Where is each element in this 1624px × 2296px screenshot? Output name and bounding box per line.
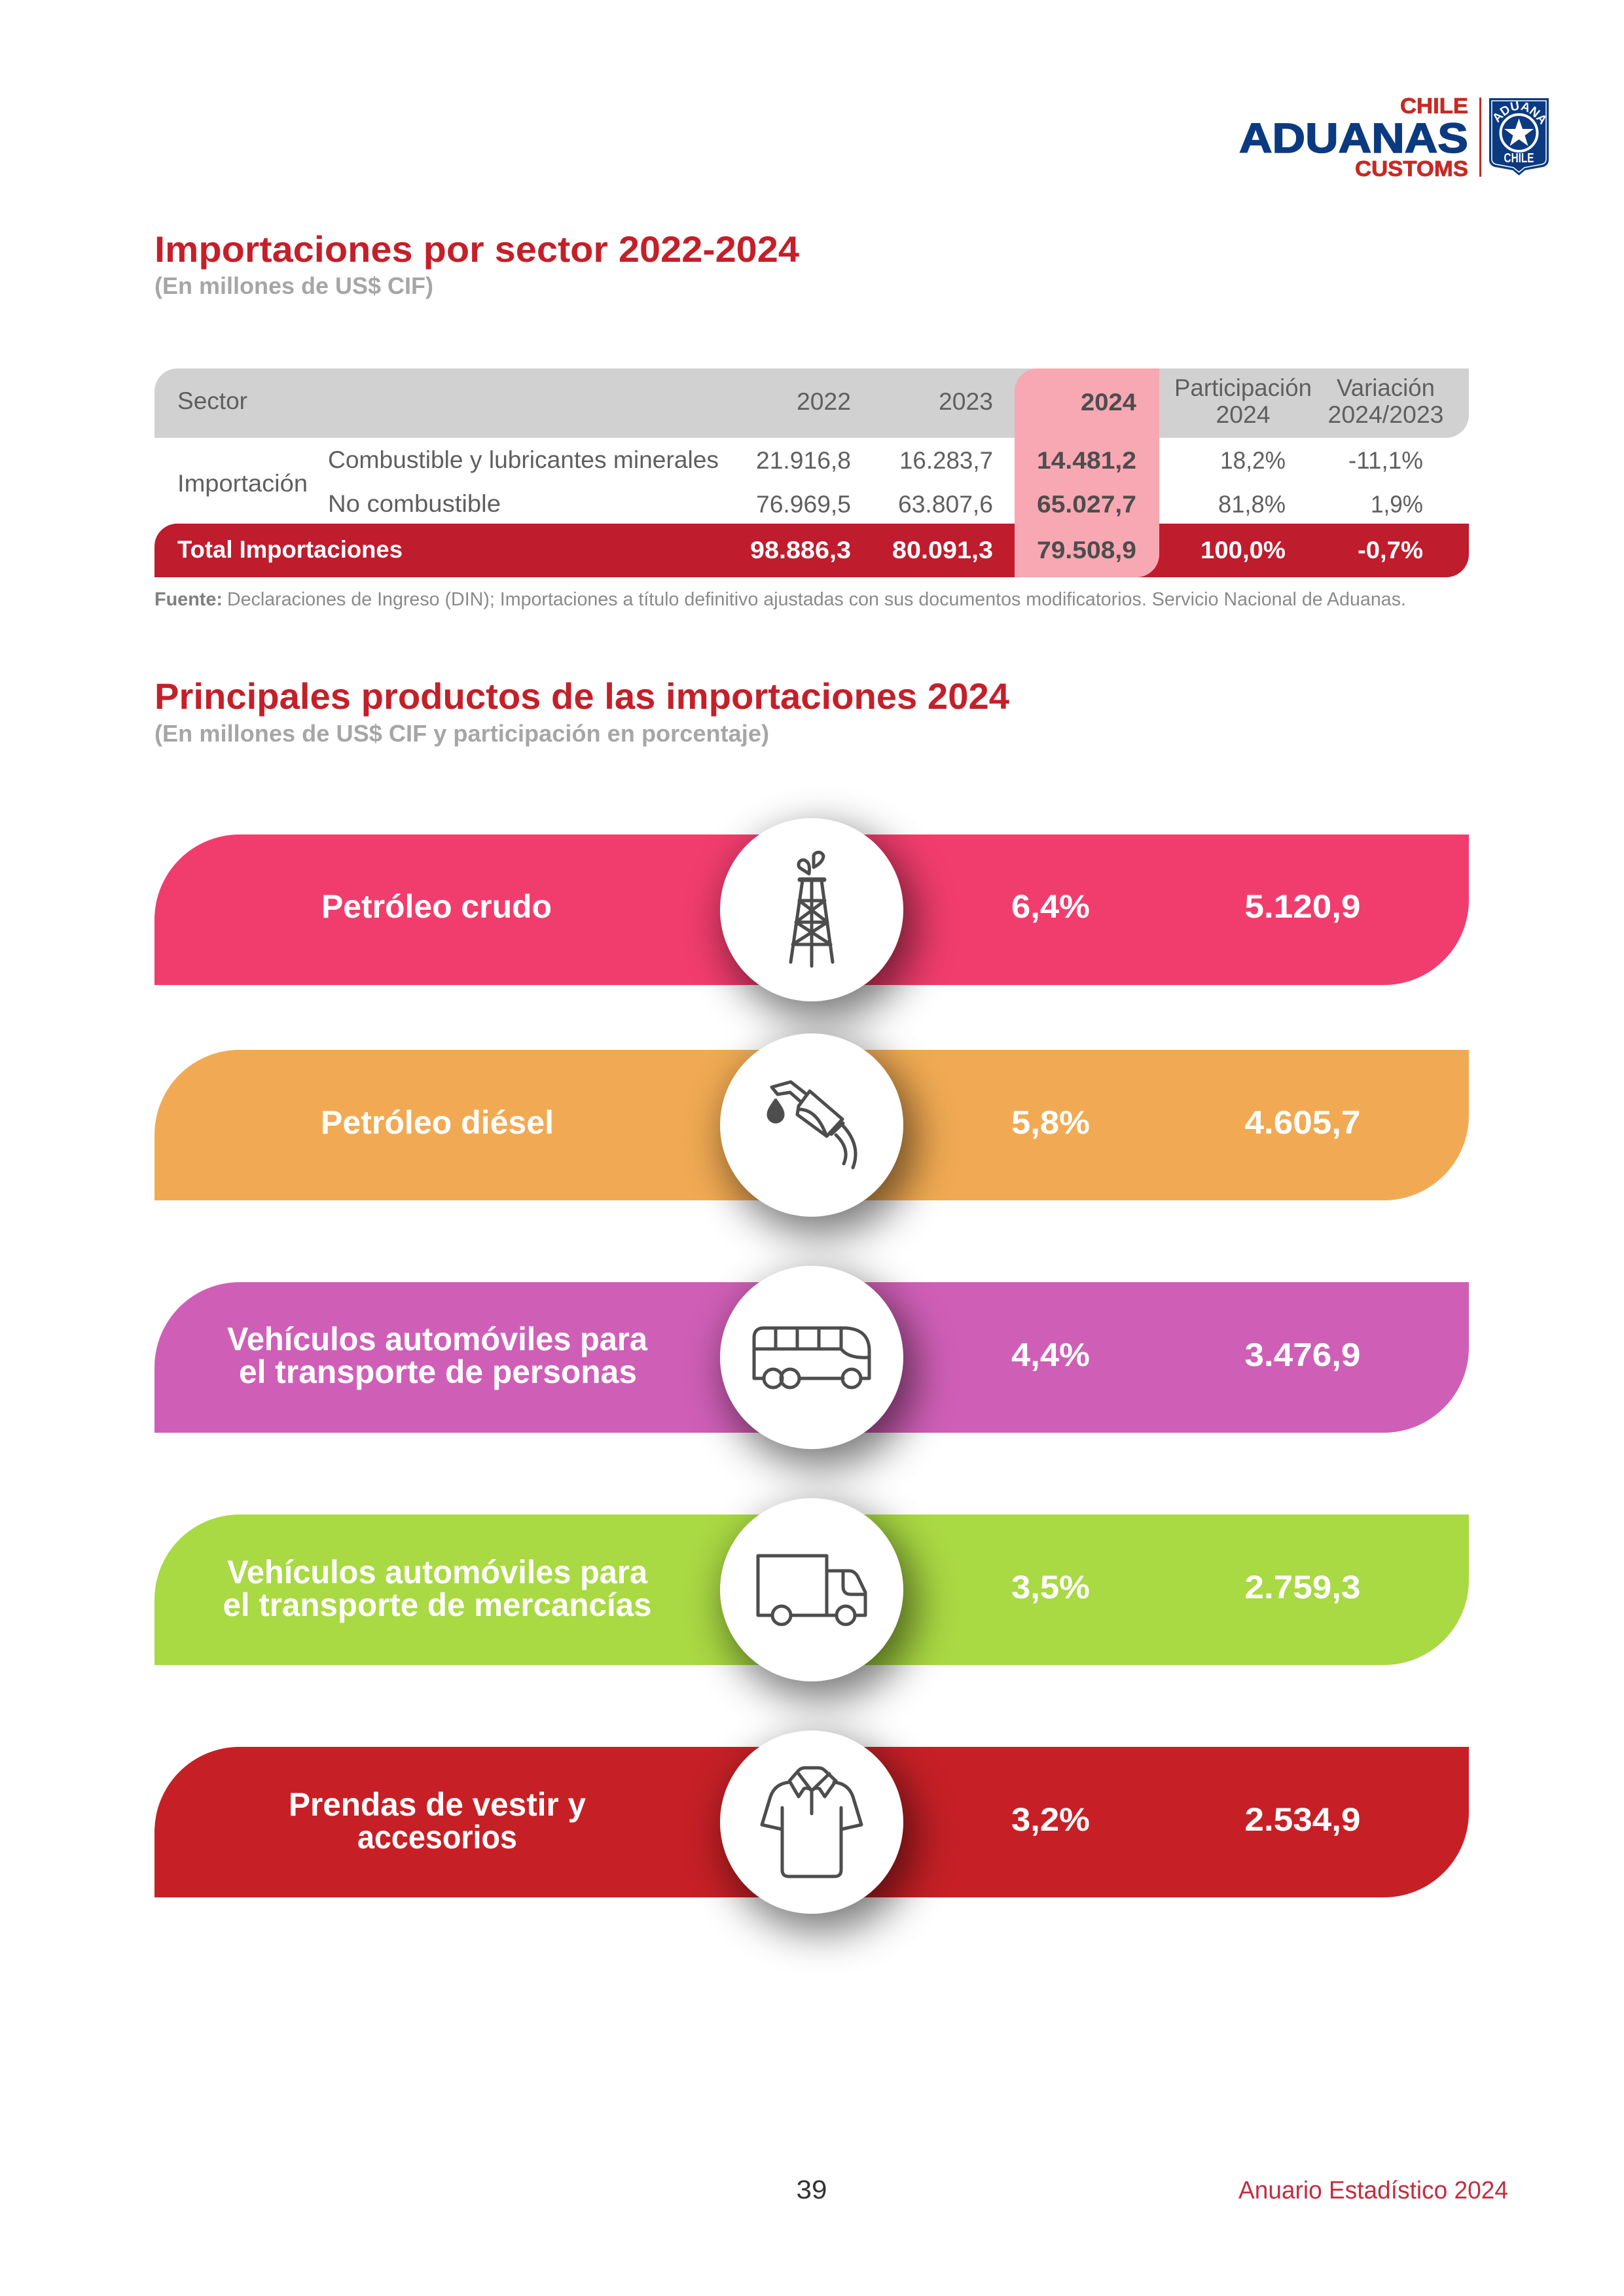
heading: Principales productos: Principales productos de las importaciones 2024 [154,675,1009,717]
source note: Declaraciones de Ingreso (DIN); Importaciones a título definitivo ajustadas con sus documentos modificatorios. Servicio Nacional de Aduanas. [227,589,1406,610]
value: 2.534,9: 2.534,9 [1245,1801,1360,1838]
table row: no combustible: No combustible [328,490,501,517]
table row: combustible: 16.283,7 [899,447,993,474]
page number: 39 [796,2176,827,2204]
table header labels: 2023 [939,388,993,415]
table: imports by sector [154,368,1469,577]
table row: no combustible: 81,8% [1218,491,1286,518]
table header labels: Variación [1337,374,1435,401]
table header labels: 2024/2023 [1327,401,1444,428]
label: Petróleo crudo: Petróleo crudo [321,888,552,925]
table row: no combustible: 65.027,7 [1037,491,1136,518]
table header background [154,368,1469,438]
subheading: product unit note: (En millones de US$ CIF y participación en porcentaje) [154,720,769,747]
table row: total: Total Importaciones [177,536,403,563]
logo text: CUSTOMS: CUSTOMS [1355,156,1468,181]
share: 3,5%: 3,5% [1011,1569,1090,1605]
table row: combustible: 14.481,2 [1037,447,1136,474]
logo divider [1479,98,1481,177]
product bar: Petróleo diésel [154,1033,1469,1235]
label: Vehículos automóviles para el transporte de mercancías: el transporte de mercancías [223,1587,652,1623]
logo text: CHILE: CHILE [1400,94,1468,118]
icon: truck [758,1556,865,1624]
highlighted 2024 column [1015,368,1159,577]
source note: Fuente: [154,589,223,610]
label: Prendas de vestir y accesorios: accesorios [357,1819,517,1856]
value: 2.759,3: 2.759,3 [1245,1569,1360,1605]
table header labels: Participación [1174,374,1312,401]
table header labels: Sector [177,387,247,414]
table row: no combustible [328,490,1423,518]
label: Prendas de vestir y accesorios [289,1786,586,1856]
subheading: unit note: (En millones de US$ CIF) [154,272,433,299]
icon: fuel nozzle [768,1082,856,1168]
logo text: ADUANAS: ADUANAS [1239,115,1468,162]
table row: no combustible: 63.807,6 [898,491,993,518]
value: 3.476,9: 3.476,9 [1245,1336,1360,1373]
logo shield [1489,98,1549,175]
heading: Importaciones por sector [154,228,799,299]
table row: total: 79.508,9 [1037,537,1136,564]
logo shield: CHILE [1504,151,1534,166]
value: 4.605,7: 4.605,7 [1245,1104,1360,1141]
share: 5,8%: 5,8% [1011,1104,1090,1141]
table row: no combustible: 76.969,5 [756,491,851,518]
product bar: vehículos para mercancías [154,1498,1469,1700]
table header labels: 2022 [797,388,851,415]
icon: bus [754,1328,869,1388]
row label: Importación: Importación [177,470,308,497]
table header labels: 2024 [1216,401,1270,428]
heading: Importaciones por sector: Importaciones por sector 2022-2024 [154,228,799,270]
logo: Aduanas Chile Customs [1239,94,1549,181]
table row: total: -0,7% [1358,537,1423,564]
table total row background [154,524,1469,577]
table row: combustible: 21.916,8 [756,447,851,474]
table row: combustible: Combustible y lubricantes minerales [328,446,719,473]
share: 3,2%: 3,2% [1011,1801,1090,1838]
table row: total: 98.886,3 [750,537,851,564]
table header labels: 2024 [1081,389,1136,416]
heading: Principales productos [154,675,1009,747]
table row: combustible [328,446,1423,474]
table row: total: 80.091,3 [892,537,993,564]
icon: oil derrick [791,852,833,966]
product bar: Petróleo crudo [154,818,1469,1020]
share: 4,4%: 4,4% [1011,1336,1090,1373]
table row: total [177,536,1423,564]
table row: no combustible: 1,9% [1371,491,1423,518]
product bar: prendas de vestir [154,1731,1469,1932]
icon: polo shirt [762,1768,861,1876]
label: Petróleo diésel: Petróleo diésel [321,1104,554,1141]
label: Vehículos automóviles para el transporte de personas: el transporte de personas [239,1354,637,1390]
label: Vehículos automóviles para el transporte de personas: Vehículos automóviles para [227,1321,648,1357]
footer: Anuario Estadístico 2024: Anuario Estadístico 2024 [1238,2177,1508,2204]
label: Vehículos automóviles para el transporte de personas [227,1321,648,1390]
label: Vehículos automóviles para el transporte de mercancías [223,1554,652,1623]
table row: combustible: 18,2% [1220,447,1286,474]
product bar: vehículos para personas [154,1266,1469,1467]
table header labels [177,374,1444,428]
value: 5.120,9: 5.120,9 [1245,888,1360,925]
label: Vehículos automóviles para el transporte de mercancías: Vehículos automóviles para [227,1554,648,1590]
label: Prendas de vestir y accesorios: Prendas de vestir y [289,1786,586,1823]
table row: total: 100,0% [1200,537,1286,564]
table row: combustible: -11,1% [1348,447,1423,474]
share: 6,4%: 6,4% [1011,888,1090,925]
